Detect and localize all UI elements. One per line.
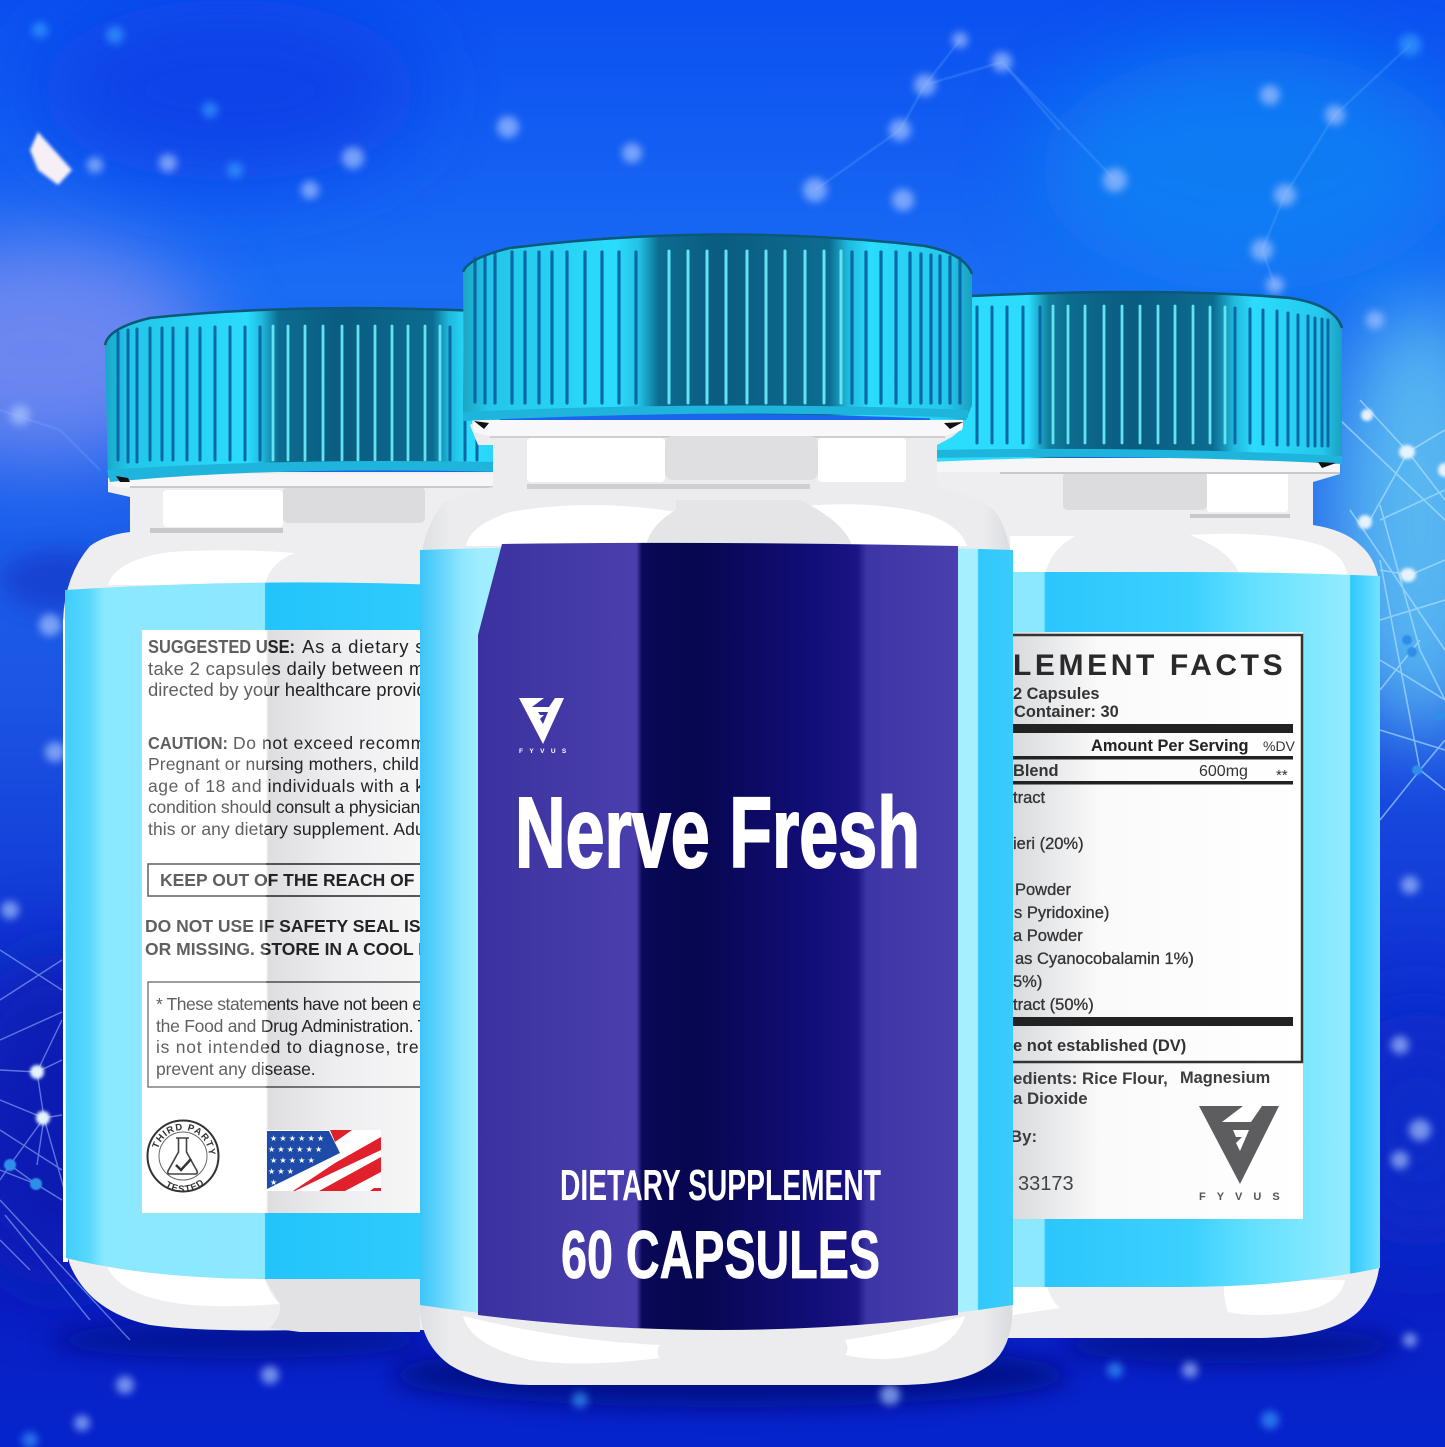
- icon: FYVUS white logo: FYVUS: [519, 748, 573, 755]
- suggested use text: take 2 capsules daily between meals or as: [148, 658, 508, 679]
- supplement facts box: 5%): [1013, 973, 1042, 991]
- product name: Nerve Fresh: [515, 777, 920, 889]
- supplement facts box: tract (50%): [1013, 996, 1094, 1014]
- keep out of reach box: [147, 863, 420, 897]
- caution text: CAUTION:: [148, 733, 228, 753]
- caution text: Pregnant or nursing mothers, children under the: [148, 754, 524, 774]
- right bottle body: [930, 458, 1380, 1338]
- supplement facts box: e not established (DV): [1013, 1037, 1186, 1055]
- safety seal warning: [146, 920, 420, 955]
- caution text: condition should consult a physician before using: [148, 797, 519, 817]
- supplement facts box: s Pyridoxine): [1014, 904, 1109, 922]
- right bottle white facts panel: [1013, 632, 1304, 1219]
- suggested use text: SUGGESTED USE:: [148, 636, 295, 657]
- other ingredients text: a Dioxide: [1013, 1089, 1088, 1108]
- other ingredients text: edients: Rice Flour,: [1013, 1069, 1168, 1088]
- keep out of reach box: KEEP OUT OF THE REACH OF CHILDREN: [160, 870, 510, 890]
- icon: american flag: ★ ★ ★: [268, 1167, 294, 1176]
- left bottle label: [65, 582, 440, 1279]
- icon: third party tested seal: THIRD PARTY: [152, 1124, 216, 1154]
- zip code: 33173: [1018, 1173, 1074, 1195]
- supplement facts box: **: [1276, 767, 1288, 784]
- centre bottle neck highlight: [466, 420, 967, 546]
- supplement facts box: ieri (20%): [1013, 835, 1084, 853]
- supplement facts box: tract: [1013, 789, 1046, 807]
- icon: FYVUS grey logo: [1199, 1106, 1291, 1203]
- supplement facts box: 2 Capsules: [1013, 685, 1100, 703]
- centre bottle base highlights: [463, 1316, 965, 1364]
- other ingredients text: By:: [1010, 1127, 1037, 1146]
- supplement facts box: [1013, 634, 1304, 1064]
- icon: FYVUS white logo: [519, 698, 573, 755]
- FDA disclaimer box: [147, 981, 420, 1088]
- FDA disclaimer box: prevent any disease.: [156, 1059, 316, 1079]
- supplement facts box: Amount Per Serving: [1091, 737, 1249, 755]
- centre bottle cap: [463, 234, 972, 429]
- FDA disclaimer box: * These statements have not been evaluated by: [156, 994, 507, 1014]
- supplement facts box: Blend: [1013, 762, 1059, 780]
- centre bottle (front): [420, 234, 1013, 1385]
- icon: third party tested seal: [146, 1120, 220, 1192]
- left bottle body: [63, 472, 500, 1332]
- suggested use text: directed by your healthcare provider.: [148, 679, 447, 700]
- caution text: Do not exceed recommended dose.: [233, 733, 529, 753]
- icon: american flag: ★ ★ ★ ★ ★: [270, 1156, 315, 1165]
- right bottle label: [1000, 572, 1380, 1287]
- icon: american flag: ★ ★ ★ ★ ★ ★: [270, 1134, 324, 1143]
- supplement facts box: %DV: [1263, 738, 1296, 754]
- dietary supplement line: DIETARY SUPPLEMENT: [560, 1161, 881, 1210]
- safety seal warning: OR MISSING. STORE IN A COOL DRY PLACE: [145, 939, 518, 959]
- supplement facts box: 600mg: [1199, 763, 1248, 780]
- FDA disclaimer box: the Food and Drug Administration. This product: [156, 1016, 511, 1036]
- supplement facts box: LEMENT FACTS: [1013, 649, 1286, 682]
- suggested use text: [148, 640, 420, 700]
- icon: third party tested seal: TESTED: [167, 1180, 203, 1192]
- left bottle white text panel: [142, 630, 420, 1213]
- other ingredients text: [1010, 1069, 1270, 1146]
- left bottle (back panel): [63, 306, 500, 1332]
- left bottle cap: [105, 308, 500, 482]
- centre bottle body: [420, 420, 1012, 1385]
- right bottle cap: [930, 292, 1342, 468]
- icon: american flag: ★: [270, 1178, 277, 1187]
- supplement facts box: Container: 30: [1014, 703, 1119, 721]
- icon: FYVUS grey logo: FYVUS: [1199, 1191, 1291, 1203]
- icon: american flag: ★ ★ ★ ★ ★ ★: [268, 1145, 322, 1154]
- supplement facts box: a Powder: [1013, 927, 1083, 945]
- supplement facts box: as Cyanocobalamin 1%): [1015, 950, 1194, 968]
- caution text: age of 18 and individuals with a known medical: [148, 776, 538, 796]
- supplement facts box: Powder: [1015, 881, 1071, 899]
- safety seal warning: DO NOT USE IF SAFETY SEAL IS BROKEN: [145, 916, 501, 936]
- FDA disclaimer box: is not intended to diagnose, treat, cure or: [156, 1037, 506, 1057]
- capsule count: 60 CAPSULES: [561, 1217, 880, 1293]
- right bottle (supplement facts): [930, 292, 1380, 1338]
- centre bottle light-blue label: [420, 545, 1013, 1328]
- caution text: [148, 736, 420, 838]
- suggested use text: As a dietary supplement,: [302, 636, 525, 657]
- caution text: this or any dietary supplement. Adults only.: [148, 819, 484, 839]
- other ingredients text: Magnesium: [1180, 1069, 1270, 1087]
- icon: american flag: [267, 1130, 381, 1191]
- centre bottle indigo label panel: [478, 543, 958, 1330]
